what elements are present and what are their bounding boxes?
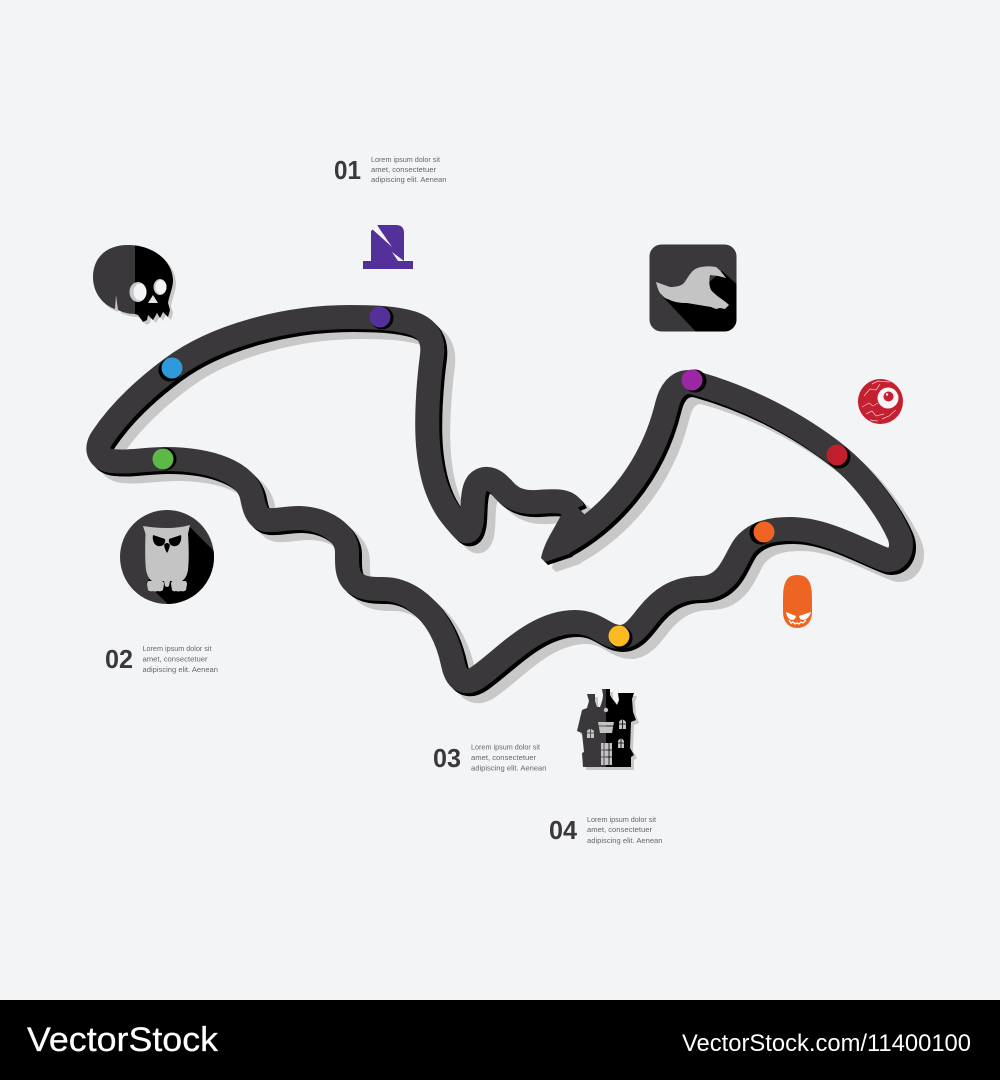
- icon: owl disc: [120, 510, 216, 606]
- marker: indigo: [370, 306, 394, 330]
- footer url: VectorStock.com/11400100: [682, 1030, 971, 1057]
- marker: blue: [158, 358, 182, 382]
- text block 03: Lorem ipsum dolor sit: [471, 742, 541, 752]
- text block 02: 02: [105, 644, 133, 674]
- text block 01: amet, consectetuer: [371, 165, 436, 174]
- marker: magenta: [682, 370, 706, 392]
- icon: pumpkin face pill: [783, 575, 812, 628]
- icon: purple top hat: [363, 225, 413, 269]
- icon: skull: [93, 245, 176, 325]
- text block 02: adipiscing elit. Aenean: [142, 665, 218, 674]
- text block 02: amet, consectetuer: [142, 654, 208, 664]
- icon: bloodshot eyeball: [858, 379, 903, 424]
- text block 04: amet, consectetuer: [587, 825, 652, 834]
- text block 03: adipiscing elit. Aenean: [471, 764, 546, 772]
- footer bar: [0, 1000, 1000, 1080]
- text block 04: adipiscing elit. Aenean: [587, 836, 662, 845]
- marker: orange: [750, 522, 774, 544]
- marker: green: [152, 448, 176, 470]
- owl body: [143, 525, 190, 587]
- text block 04: Lorem ipsum dolor sit: [587, 815, 657, 824]
- footer brand: VectorStock: [27, 1021, 219, 1059]
- marker: red: [826, 444, 850, 468]
- text block 04: [549, 815, 662, 845]
- text block 03: 03: [433, 743, 461, 773]
- text block 03: amet, consectetuer: [471, 753, 536, 762]
- text block 04: 04: [549, 815, 578, 845]
- text block 02: [105, 644, 218, 674]
- icon: haunted house: [577, 689, 639, 770]
- icon: witch hat tile: [650, 244, 740, 334]
- text block 03: [433, 742, 546, 773]
- marker: yellow: [608, 626, 632, 650]
- text block 01: adipiscing elit. Aenean: [371, 175, 446, 184]
- text block 02: Lorem ipsum dolor sit: [142, 644, 212, 653]
- text block 01: [334, 155, 446, 185]
- text block 01: 01: [334, 155, 361, 185]
- bat-shaped road: [98, 317, 912, 691]
- text block 01: Lorem ipsum dolor sit: [371, 155, 441, 164]
